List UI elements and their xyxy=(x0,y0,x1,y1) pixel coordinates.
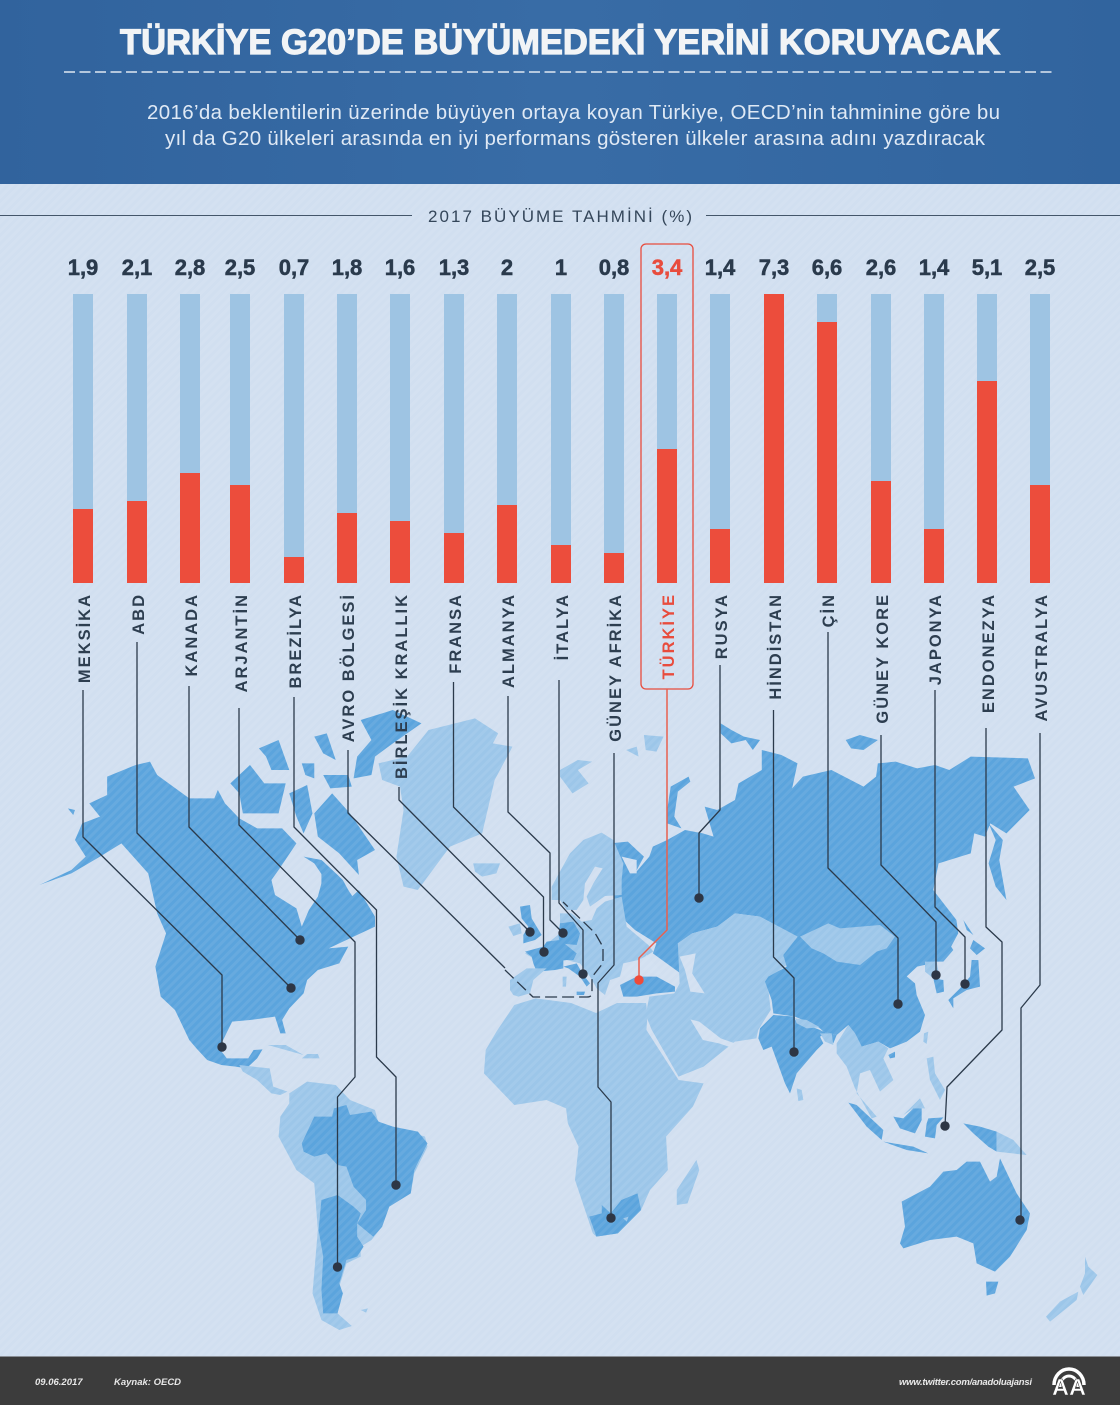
footer: Kaynak: OECD xyxy=(114,1377,181,1388)
bar: Birleşik Krallık xyxy=(385,255,415,779)
bar: Japonya: 1,4 xyxy=(919,255,950,280)
bar: Endonezya xyxy=(972,255,1002,713)
map: Indonesia and Oceania xyxy=(848,1098,1097,1322)
bar: Meksika: MEKSİKA xyxy=(76,593,94,683)
bar: ABD: ABD xyxy=(130,593,148,635)
bar: Rusya: RUSYA xyxy=(713,593,731,659)
footer xyxy=(0,1356,1120,1405)
bar: Brezilya: 0,7 xyxy=(279,255,309,280)
bar: ABD: 2,1 xyxy=(122,255,152,280)
bar: Türkiye: TÜRKİYE xyxy=(659,593,678,679)
bar: Güney Kore: 2,6 xyxy=(866,255,896,280)
bar: Birleşik Krallık: 1,6 xyxy=(385,255,415,280)
bar: Brezilya xyxy=(279,255,309,688)
bar: Kanada: KANADA xyxy=(183,593,201,676)
bar: Türkiye xyxy=(652,255,683,679)
bar: Kanada xyxy=(175,255,205,676)
bar: İtalya xyxy=(551,255,572,660)
bar: Arjantin: ARJANTİN xyxy=(233,593,251,692)
map: Russia and Middle East xyxy=(560,723,1035,1077)
bar: Fransa xyxy=(439,255,469,674)
bar: Güney Afrika: GÜNEY AFRİKA xyxy=(606,593,625,742)
bar chart xyxy=(68,255,1055,779)
bar: Güney Kore xyxy=(866,255,896,724)
bar: Birleşik Krallık: BİRLEŞİK KRALLIK xyxy=(393,593,411,779)
bar: Fransa: 1,3 xyxy=(439,255,469,280)
bar: Brezilya: BREZİLYA xyxy=(287,593,305,688)
subtitle: yıl da G20 ülkeleri arasında en iyi performans gösteren ülkeler arasına adını yazdıracak xyxy=(165,127,986,150)
icon: AA logo: AA xyxy=(1052,1374,1086,1400)
bar: Çin: ÇİN xyxy=(820,593,838,627)
title: TÜRKİYE G20’DE BÜYÜMEDEKİ YERİNİ KORUYACAK xyxy=(120,23,1000,62)
bar: Almanya xyxy=(497,255,518,688)
bar: ABD xyxy=(122,255,152,635)
header panel xyxy=(0,0,1120,184)
bar: Güney Afrika: 0,8 xyxy=(599,255,629,280)
bar: Avustralya xyxy=(1025,255,1055,722)
bar: Avro Bölgesi xyxy=(332,255,362,742)
bar: Endonezya: ENDONEZYA xyxy=(980,593,998,713)
bar: Arjantin xyxy=(225,255,255,692)
bar: Meksika xyxy=(68,255,98,683)
bar: İtalya: İTALYA xyxy=(554,593,572,660)
Turkey highlight xyxy=(634,244,693,985)
bar: Çin xyxy=(812,255,842,627)
bar: Avro Bölgesi: 1,8 xyxy=(332,255,362,280)
bar: Rusya: 1,4 xyxy=(705,255,736,280)
subtitle: 2016’da beklentilerin üzerinde büyüyen ortaya koyan Türkiye, OECD’nin tahminine göre bu xyxy=(147,101,1000,124)
bar: Türkiye: 3,4 xyxy=(652,255,683,280)
bar: Japonya xyxy=(919,255,950,685)
chart heading: 2017 BÜYÜME TAHMİNİ (%) xyxy=(428,207,692,226)
bar: Arjantin: 2,5 xyxy=(225,255,255,280)
bar: Endonezya: 5,1 xyxy=(972,255,1002,280)
bar: Hindistan: 7,3 xyxy=(759,255,789,280)
footer: 09.06.2017 xyxy=(35,1377,83,1388)
bar: Fransa: FRANSA xyxy=(447,593,465,674)
bar: Almanya: 2 xyxy=(501,255,513,280)
map: North America xyxy=(39,710,512,1050)
bar: Japonya: JAPONYA xyxy=(927,593,945,685)
bar: Kanada: 2,8 xyxy=(175,255,205,280)
bar: Avro Bölgesi: AVRO BÖLGESİ xyxy=(339,593,358,742)
bar: İtalya: 1 xyxy=(555,255,567,280)
bar: Güney Afrika xyxy=(599,255,629,742)
footer: www.twitter.com/anadoluajansi xyxy=(899,1377,1032,1388)
bar: Meksika: 1,9 xyxy=(68,255,98,280)
bar: Avustralya: AVUSTRALYA xyxy=(1033,593,1051,722)
bar: Almanya: ALMANYA xyxy=(500,593,518,688)
map: South and East Asia xyxy=(758,920,985,1118)
world map xyxy=(39,710,1097,1330)
bar: Hindistan xyxy=(759,255,789,700)
map: Europe and Turkey xyxy=(508,833,675,997)
bar: Güney Kore: GÜNEY KORE xyxy=(873,593,892,724)
subtitle xyxy=(147,101,1000,150)
bar: Çin: 6,6 xyxy=(812,255,842,280)
map: Central and South America, Africa xyxy=(189,998,704,1330)
bar: Rusya xyxy=(705,255,736,659)
leader lines and country dots xyxy=(83,632,1040,1272)
bar: Avustralya: 2,5 xyxy=(1025,255,1055,280)
bar: Hindistan: HİNDİSTAN xyxy=(767,593,785,700)
